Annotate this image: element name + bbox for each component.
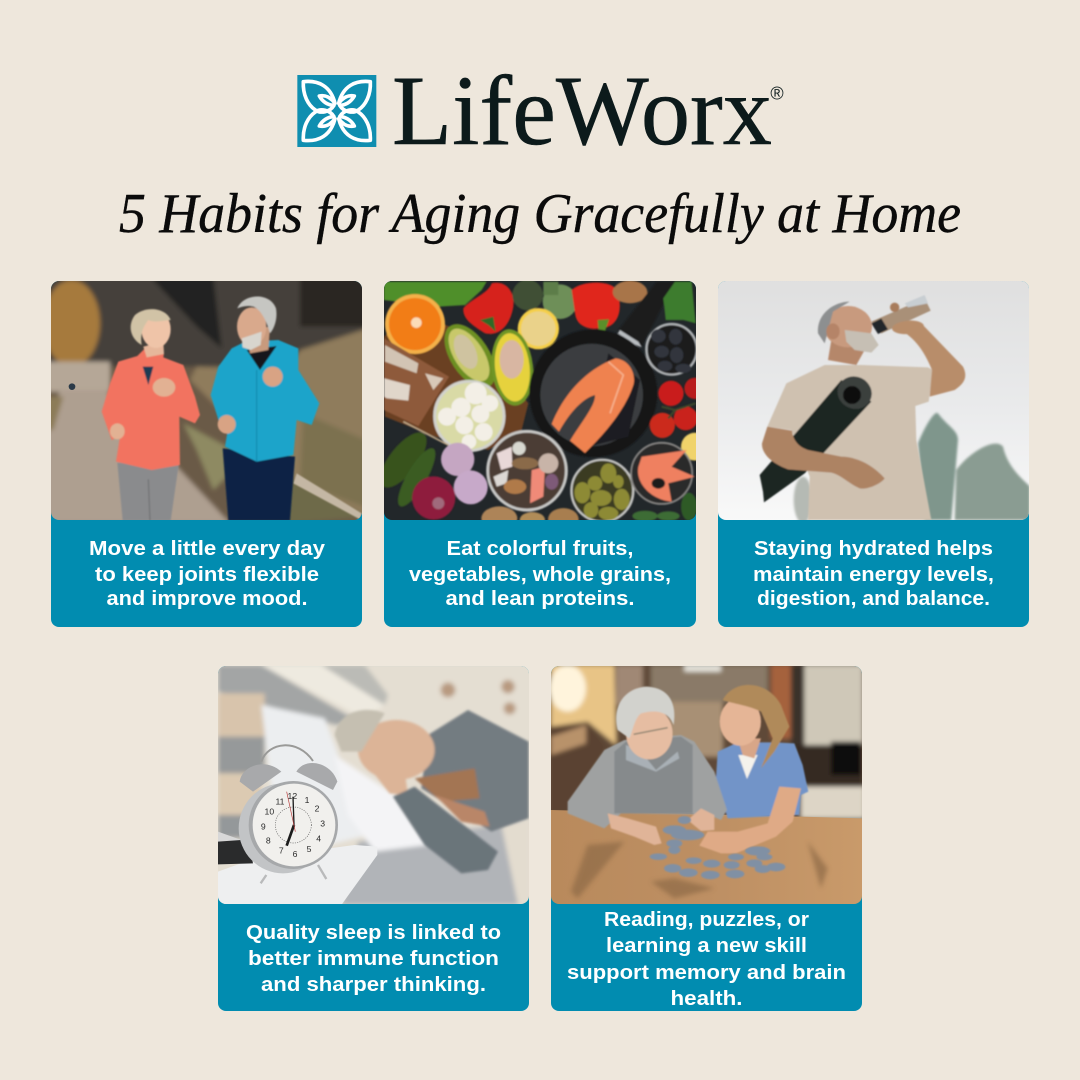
cutting board — [384, 310, 528, 450]
potato — [613, 281, 647, 303]
caption — [409, 537, 671, 610]
trees — [794, 413, 1030, 523]
torso — [767, 365, 933, 520]
bottle — [871, 298, 931, 333]
seafood bowl — [488, 431, 566, 510]
caption: to keep joints flexible — [95, 563, 319, 586]
headboard stripes — [218, 665, 365, 725]
olive bowl green — [571, 460, 633, 522]
puzzle pieces — [650, 816, 785, 879]
clock numerals: 4 — [316, 833, 321, 843]
caption: Quality sleep is linked to — [246, 921, 501, 944]
clock numerals: 9 — [261, 822, 266, 832]
drinking arm — [895, 323, 965, 397]
photo: couple jogging — [51, 281, 362, 520]
caption: and improve mood. — [106, 587, 308, 610]
lettuce — [384, 282, 487, 307]
caption: Eat colorful fruits, — [446, 537, 634, 560]
caption: better immune function — [248, 947, 499, 970]
pillows — [261, 705, 368, 845]
registered mark: ® — [770, 84, 784, 104]
pan — [529, 329, 657, 457]
hand on bottle — [891, 319, 925, 335]
photo: doing a puzzle with caregiver — [541, 662, 874, 905]
man — [223, 448, 295, 521]
clock numerals: 10 — [265, 806, 274, 816]
clock numerals: 12 — [288, 791, 297, 801]
caption: learning a new skill — [606, 934, 807, 957]
caption: Reading, puzzles, or — [604, 908, 809, 931]
pepper one — [463, 283, 514, 334]
caption: Staying hydrated helps — [754, 537, 993, 560]
nightstand — [218, 845, 377, 905]
panel: quality sleep — [208, 662, 541, 1011]
clock numerals — [261, 791, 325, 859]
caption: health. — [670, 987, 742, 1010]
panel: move every day — [40, 270, 373, 627]
caption: Move a little every day — [89, 537, 326, 560]
caption: and lean proteins. — [446, 587, 634, 610]
table — [551, 810, 863, 905]
clock numerals: 2 — [315, 804, 320, 814]
lemon right — [680, 432, 696, 462]
clock numerals: 8 — [266, 836, 271, 846]
caregiver — [716, 742, 808, 818]
olive bowl black — [646, 324, 697, 375]
broccoli — [512, 280, 543, 310]
yoga mat — [760, 380, 871, 502]
clock numerals: 5 — [307, 844, 312, 854]
caption: maintain energy levels, — [753, 563, 994, 586]
caption — [246, 921, 501, 996]
woman — [117, 463, 179, 521]
sleeping woman — [421, 710, 529, 832]
tomatoes — [658, 381, 684, 406]
clock numerals: 6 — [293, 849, 298, 859]
logo wordmark: LifeWorx — [392, 55, 772, 166]
panel: hydration — [708, 277, 1041, 627]
caption — [89, 537, 326, 610]
pan handle — [618, 282, 675, 347]
title: 5 Habits for Aging Gracefully at Home — [119, 183, 961, 245]
cucumbers — [384, 432, 428, 488]
alarm clock — [239, 745, 338, 883]
lemon — [518, 308, 559, 349]
bed — [341, 822, 529, 905]
panel: colorful food — [372, 270, 709, 627]
bread — [384, 338, 449, 426]
caption: digestion, and balance. — [757, 587, 990, 610]
head — [824, 306, 872, 347]
caption — [567, 908, 846, 1010]
clock numerals: 11 — [275, 796, 285, 806]
caption — [753, 537, 994, 610]
clock numerals: 1 — [305, 795, 310, 805]
photo: sleeping woman and alarm clock — [208, 662, 541, 915]
lower arm and hand — [762, 427, 885, 489]
shrimp bowl — [631, 443, 692, 504]
avocado halves — [444, 323, 494, 386]
icon: flower mark — [297, 75, 376, 147]
potatoes and herbs — [480, 505, 518, 520]
elderly woman — [568, 735, 727, 828]
orange — [385, 294, 445, 354]
caption: and sharper thinking. — [261, 973, 486, 996]
caption: vegetables, whole grains, — [409, 563, 671, 586]
greens right — [663, 282, 696, 323]
photo: healthy food spread — [384, 281, 696, 520]
garlic and onion — [441, 443, 474, 476]
logo: LifeWorx — [297, 55, 784, 166]
caption: support memory and brain — [567, 961, 846, 984]
pepper two — [572, 282, 620, 329]
photo: man drinking water — [718, 281, 1029, 520]
clock numerals: 3 — [320, 818, 325, 828]
salmon — [552, 358, 634, 453]
clock hands — [293, 797, 294, 825]
mozzarella bowl — [435, 381, 504, 451]
panel: brain health — [541, 662, 874, 1011]
clock numerals: 7 — [279, 846, 284, 856]
neck — [828, 340, 865, 365]
